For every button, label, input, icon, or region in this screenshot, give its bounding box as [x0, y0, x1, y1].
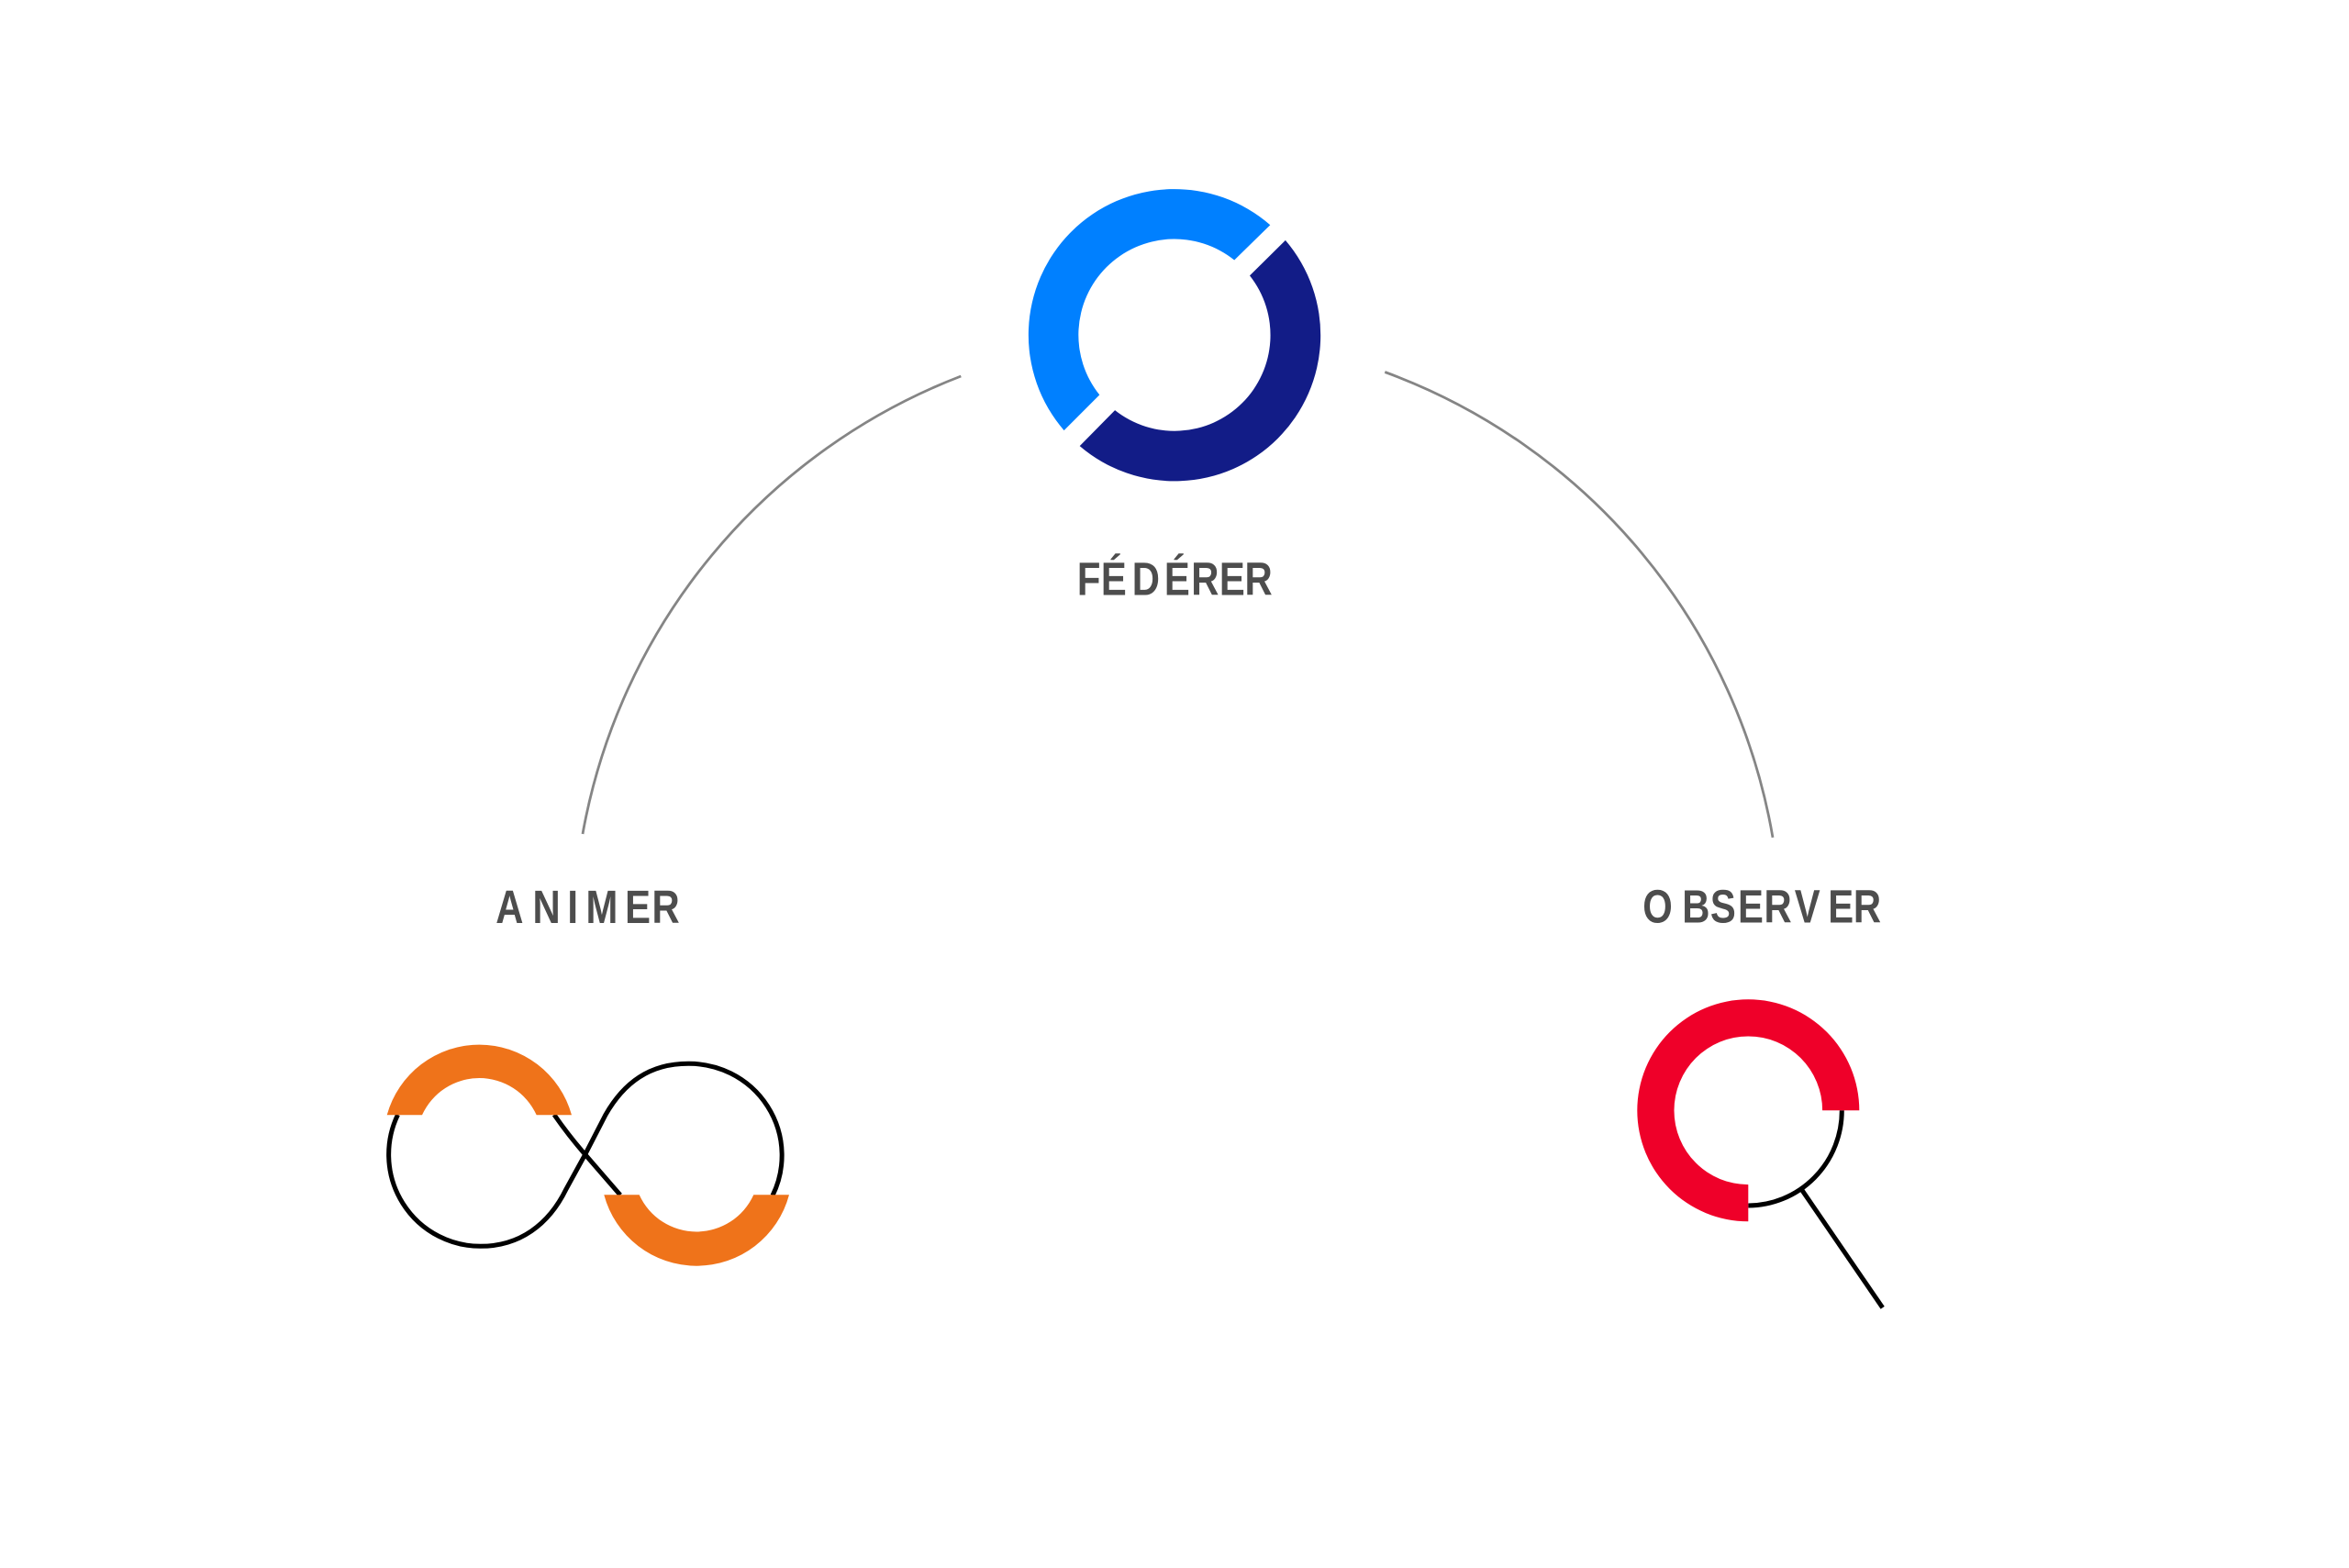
orange arc: bottom right — [604, 1195, 789, 1266]
infinity line: crossing strand — [554, 1115, 620, 1195]
icon: fédérer split ring — [1029, 189, 1320, 481]
arrow: arc from animer to fédérer — [583, 376, 961, 834]
magnifier handle — [1802, 1190, 1883, 1307]
icon: animer infinity loop — [387, 1045, 789, 1266]
ring segment: light blue — [1029, 189, 1270, 430]
icon: observer magnifying glass — [1637, 999, 1883, 1307]
magnifier lens line — [1748, 1110, 1842, 1206]
orange arc: top left — [387, 1045, 572, 1115]
heading: fédérer: FÉDÉRER — [1077, 552, 1273, 605]
ring segment: dark blue — [1080, 240, 1320, 481]
infinity line: main strand — [389, 1063, 782, 1246]
heading: animer: ANIMER — [495, 881, 680, 933]
arrow: arc from fédérer to observer — [1385, 373, 1773, 838]
heading: observer: OBSERVER — [1642, 881, 1881, 933]
red arc — [1637, 999, 1859, 1221]
